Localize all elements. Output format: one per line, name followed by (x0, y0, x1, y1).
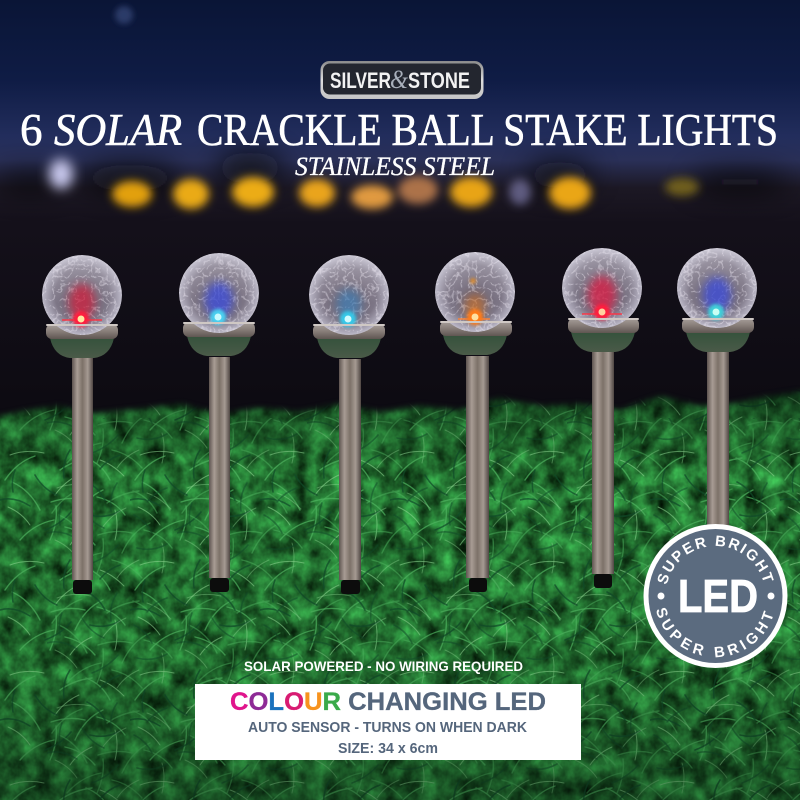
heading: colour changing LED: COLOUR CHANGING LED (230, 688, 546, 716)
stake light 5 (red) (562, 248, 642, 588)
cup (686, 332, 750, 352)
logo: Silver & Stone: STONE (408, 68, 470, 93)
stake light 2 (blue) (179, 253, 259, 592)
globe (42, 255, 122, 335)
info panel (195, 684, 581, 760)
stake (466, 356, 489, 578)
stake (209, 357, 230, 578)
cup (187, 336, 251, 356)
stake (72, 358, 93, 580)
cup (50, 338, 114, 358)
grass lawn (0, 385, 800, 800)
badge: super bright LED: SUPER BRIGHT (658, 536, 774, 584)
stake light 1 (red) (42, 255, 122, 594)
globe (435, 252, 515, 332)
size text: SIZE: 34 x 6cm (338, 741, 438, 757)
caption: solar powered: SOLAR POWERED - NO WIRING REQUIRED (244, 658, 523, 674)
badge: super bright LED: SUPER BRIGHT (656, 608, 773, 658)
cup (443, 335, 507, 355)
stake light 3 (cyan) (309, 255, 389, 594)
title: 6 (20, 105, 42, 155)
globe (309, 255, 389, 335)
badge: super bright LED: LED (678, 570, 758, 622)
logo: Silver & Stone: SILVER (330, 68, 391, 93)
stake (339, 359, 361, 580)
globe (562, 248, 642, 328)
title: SOLAR (54, 105, 182, 155)
blurred garden lights (0, 6, 790, 209)
subtitle: STAINLESS STEEL (295, 152, 495, 181)
cup (317, 338, 381, 358)
sensor text: AUTO SENSOR - TURNS ON WHEN DARK (248, 719, 527, 736)
globe (179, 253, 259, 333)
globe (677, 248, 757, 328)
cup (571, 332, 635, 352)
stake light 4 (orange) (435, 252, 515, 592)
stake light 6 (blue) (677, 248, 757, 531)
stake (592, 351, 614, 574)
logo: Silver & Stone: & (390, 65, 409, 94)
badge: super bright LED (644, 524, 788, 668)
stake (707, 351, 729, 531)
logo: Silver & Stone (320, 61, 484, 99)
